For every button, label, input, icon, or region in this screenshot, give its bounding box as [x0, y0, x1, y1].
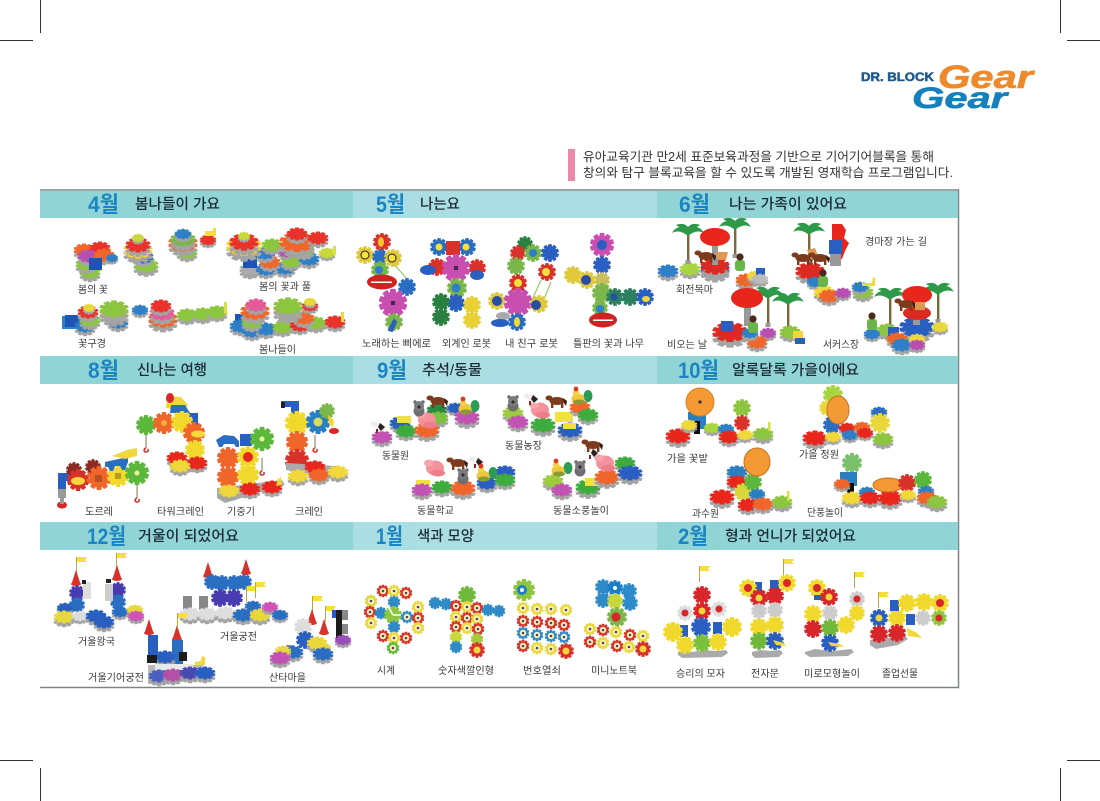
label: 승리의 모자 [676, 668, 725, 680]
label: 경마장 가는 길 [865, 235, 927, 248]
label: 기중기 [227, 506, 255, 518]
label: 단풍놀이 [807, 507, 843, 519]
toy: spring flower 3 [168, 228, 217, 262]
toy: tower crane [136, 393, 208, 476]
label: 산타마을 [269, 672, 306, 684]
toy: winter palace [179, 559, 289, 625]
toy: clock [364, 585, 424, 654]
toy: autumn garden [802, 385, 894, 450]
toy: electronic door [739, 559, 796, 658]
label: 동물소풍놀이 [553, 505, 609, 517]
label: 외계인 로봇 [442, 338, 491, 350]
heading: June: 나는 가족이 있어요 [729, 196, 847, 213]
toy: flower viewing [62, 299, 228, 336]
logo: Dr. Block Gear Gear: DR. BLOCK [861, 72, 935, 84]
heading: August: 신나는 여행 [137, 362, 207, 379]
toy: spring outing [229, 297, 346, 341]
label: 동물농장 [505, 440, 542, 452]
label: 동물학교 [417, 505, 454, 517]
logo: Dr. Block Gear Gear [861, 59, 1035, 115]
toy: road to racetrack [792, 223, 875, 306]
toy: victory hat [663, 566, 742, 658]
label: 봄의 꽃과 풀 [259, 281, 311, 293]
toy: mini notebook [584, 579, 651, 657]
toy: circus [863, 283, 954, 355]
panel: August [40, 356, 353, 518]
toy: tree and flower [564, 233, 654, 328]
toy: animal farm [502, 387, 599, 442]
heading: January: 1월 [376, 524, 403, 549]
toy: crane [281, 401, 349, 486]
panel: January [353, 522, 657, 677]
label: 전자문 [751, 668, 779, 680]
toy: autumn flower field [665, 388, 774, 448]
label: 틀판의 꽃과 나무 [573, 338, 644, 350]
label: 서커스장 [823, 339, 859, 351]
label: 가을 꽃밭 [667, 453, 708, 465]
label: 번호열쇠 [523, 665, 561, 677]
toy: autumn leaves play [833, 453, 948, 512]
heading: October [657, 356, 958, 384]
toy: santa village [269, 596, 352, 668]
heading: May: 5월 [376, 192, 405, 217]
toy: spring flowers and grass [226, 227, 336, 279]
label: 봄나들이 [259, 344, 296, 356]
label: 꽃구경 [78, 337, 106, 350]
heading: October: 10월 [678, 358, 719, 383]
panel: April [40, 191, 353, 356]
heading: February: 형과 언니가 되었어요 [725, 528, 856, 545]
intro text block: 유아교육기관 만2세 표준보육과정을 기반으로 기어기어블록을 통해 [583, 150, 934, 164]
heading: September: 9월 [377, 358, 407, 383]
logo: Dr. Block Gear Gear: Gear [912, 82, 1010, 115]
label: 타워크레인 [157, 505, 204, 518]
label: 시계 [377, 665, 395, 677]
label: 내 친구 로봇 [505, 338, 558, 350]
label: 가을 정원 [799, 449, 839, 461]
panel: October [657, 356, 958, 520]
label: 거울기어궁전 [88, 672, 144, 684]
heading: December: 거울이 되었어요 [138, 528, 239, 545]
curriculum table frame [40, 190, 958, 688]
heading: May: 나는요 [420, 196, 460, 213]
heading: February [657, 522, 958, 550]
label: 미니노트북 [591, 665, 637, 677]
heading: August [40, 356, 353, 384]
toy: number color doll [429, 586, 505, 658]
label: 거울왕국 [78, 636, 115, 648]
toy: maze model play [804, 572, 865, 657]
toy: number key [513, 579, 574, 659]
heading: December [40, 522, 353, 550]
heading: February: 2월 [678, 524, 708, 549]
heading: April: 봄나들이 가요 [135, 196, 220, 213]
heading: April [40, 191, 353, 218]
label: 노래하는 삐에로 [362, 337, 431, 350]
label: 봄의 꽃 [78, 284, 108, 296]
toy: winter gear palace [144, 613, 216, 686]
label: 비오는 날 [667, 339, 707, 351]
toy: spring flower 2 [123, 234, 159, 277]
toy: hoist [216, 427, 285, 503]
heading: August: 8월 [88, 358, 119, 383]
panel: May [353, 191, 657, 350]
label: 거울궁전 [220, 631, 257, 643]
label: 크레인 [295, 506, 323, 518]
toy: animal picnic [542, 440, 643, 500]
toy: spring flower [73, 241, 118, 282]
toy: winter kingdom [53, 553, 145, 632]
toy: pulley [57, 448, 149, 508]
heading: June [657, 191, 958, 218]
heading: April: 4월 [88, 192, 119, 217]
toy: rainy day [712, 287, 805, 352]
toy: orchard [709, 448, 793, 515]
label: 숫자색깔인형 [438, 665, 494, 677]
heading: January [353, 522, 657, 550]
toy: graduation gift [870, 592, 949, 649]
label: 미로모형놀이 [804, 668, 860, 680]
toy: merry-go-round [657, 218, 769, 290]
intro text block [568, 149, 953, 181]
logo: Dr. Block Gear Gear: Gear [938, 59, 1035, 95]
panel: February [657, 522, 958, 680]
heading: October: 알록달록 가을이에요 [732, 362, 859, 379]
intro text block: 창의와 탐구 블록교육을 할 수 있도록 개발된 영재학습 프로그램입니다. [583, 166, 953, 180]
label: 동물원 [382, 450, 409, 462]
heading: January: 색과 모양 [417, 528, 474, 545]
toy: singing pierrot [356, 233, 416, 331]
toy: my friend robot [488, 236, 559, 331]
toy: zoo [370, 396, 480, 447]
label: 회전목마 [676, 284, 713, 296]
panel: December [40, 522, 353, 686]
panel: September [353, 356, 657, 517]
heading: December: 12월 [87, 524, 126, 549]
toy: alien robot [420, 238, 486, 329]
heading: September [353, 356, 657, 384]
label: 과수원 [692, 508, 719, 520]
panel: June [657, 191, 958, 355]
heading: September: 추석/동물 [422, 362, 482, 379]
label: 졸업선물 [882, 667, 918, 680]
label: 도르레 [85, 506, 113, 518]
toy: animal school [411, 456, 516, 500]
heading: May [353, 191, 657, 218]
heading: June: 6월 [679, 192, 710, 217]
